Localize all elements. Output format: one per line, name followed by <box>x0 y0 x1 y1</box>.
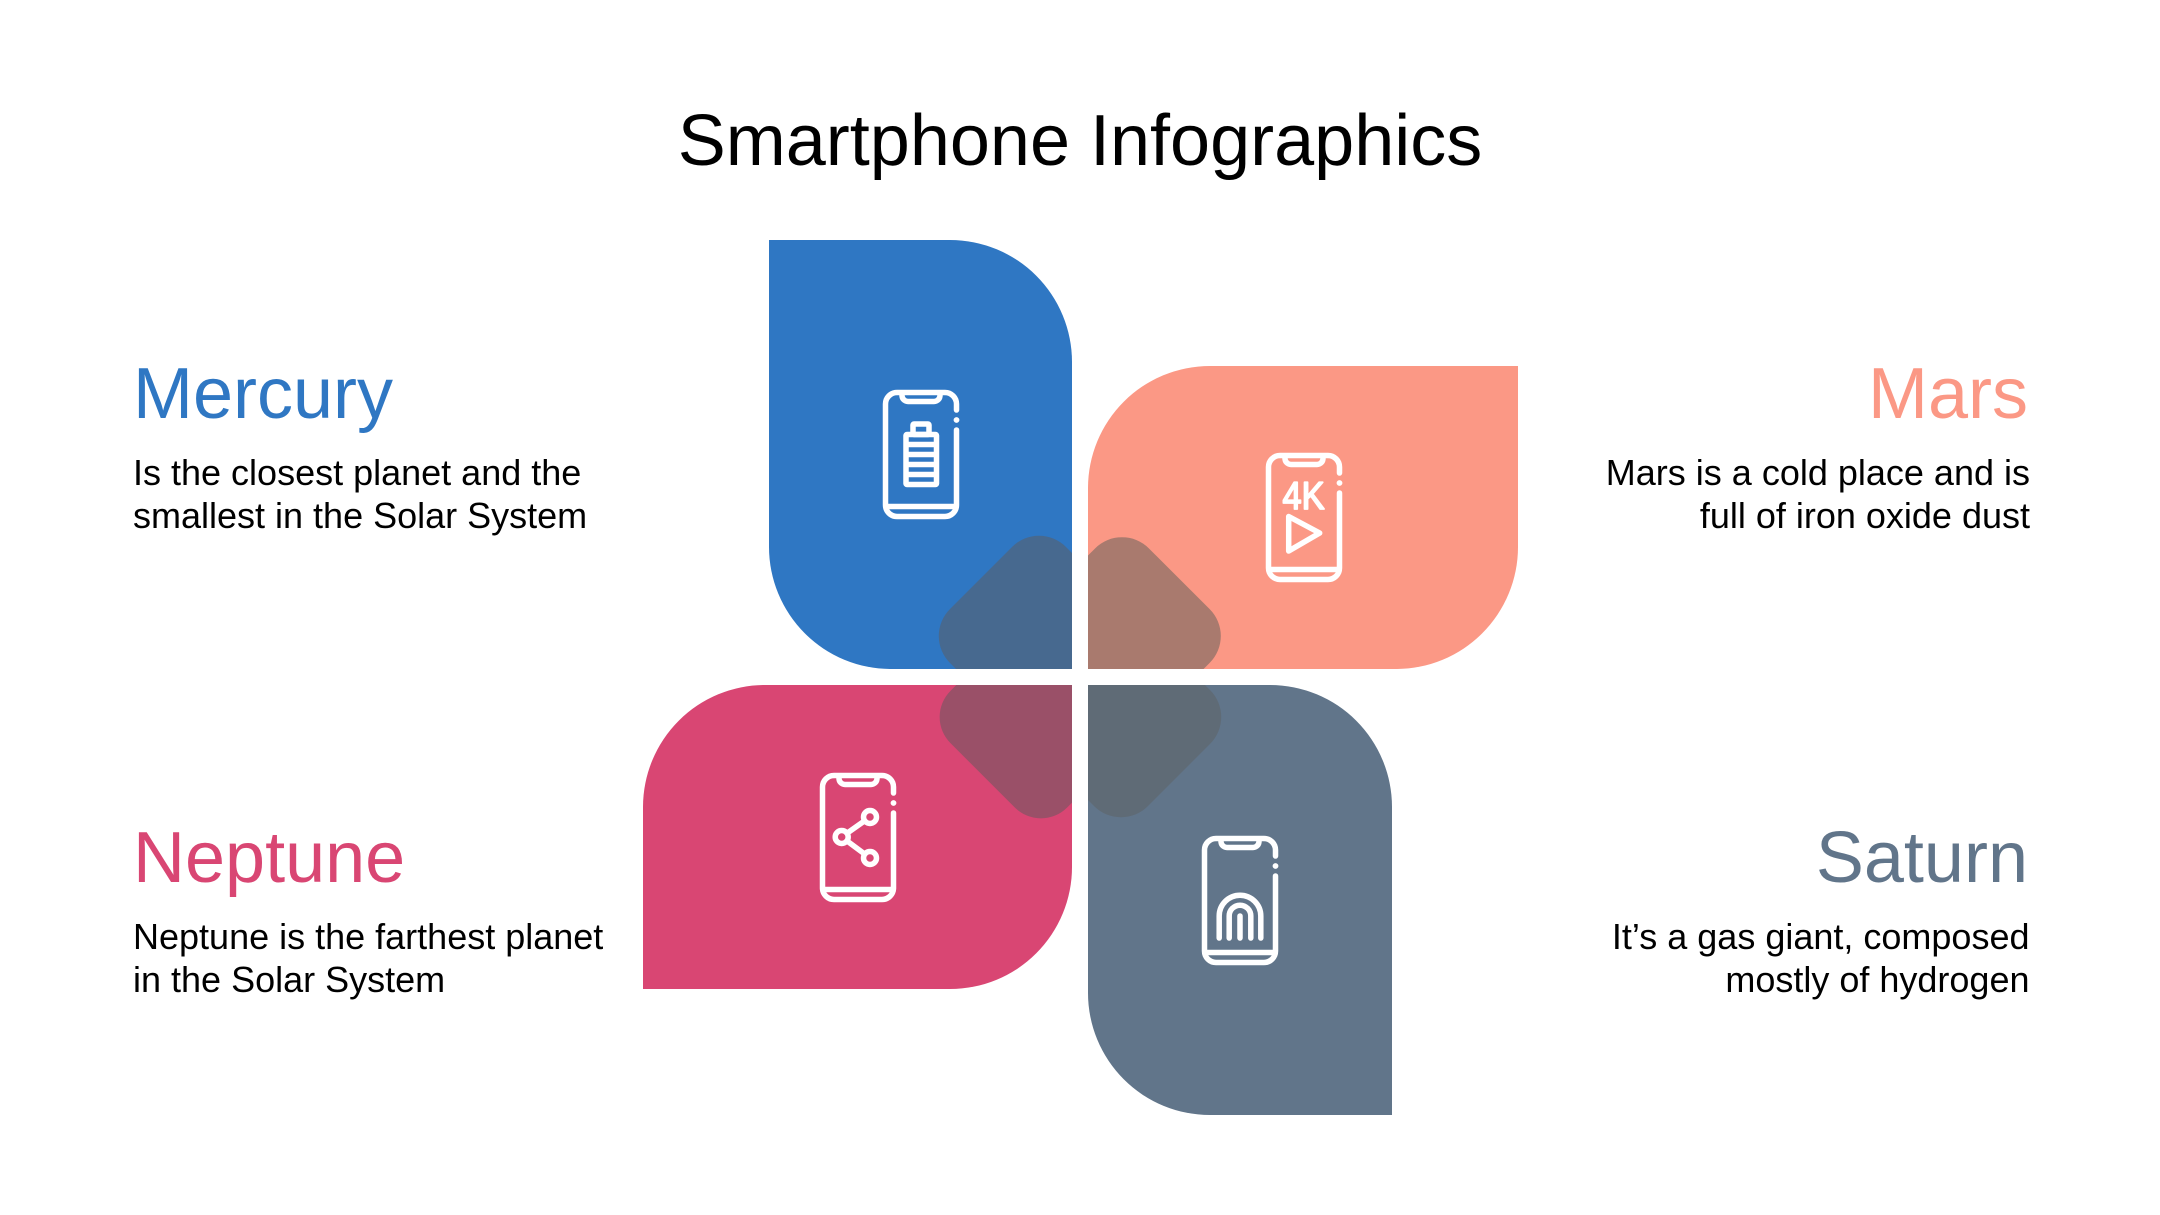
text block: Saturn description: mostly of hydrogen <box>1725 959 2030 1000</box>
petal: Saturn <box>1088 685 1392 1115</box>
title: Smartphone Infographics <box>678 101 1482 181</box>
panel: Neptune text <box>133 818 603 1000</box>
text block: Saturn description: It’s a gas giant, composed <box>1612 916 2030 957</box>
petal: Mercury <box>769 240 1072 669</box>
panel: Mercury text <box>133 354 587 536</box>
heading: Saturn: Saturn <box>1816 818 2028 898</box>
petal shape: blue <box>769 240 1072 669</box>
text block: Mercury description: smallest in the Solar System <box>133 495 587 536</box>
text block: Neptune description: in the Solar System <box>133 959 445 1000</box>
icon: phone with 4K video <box>1268 456 1342 580</box>
heading: Neptune: Neptune <box>133 818 405 898</box>
overlap: pink <box>940 685 1072 818</box>
panel: Saturn text <box>1612 818 2030 1000</box>
text block: Mars description: Mars is a cold place and is <box>1606 452 2030 493</box>
heading: Mercury: Mercury <box>133 354 393 434</box>
text block: Neptune description: Neptune is the farthest planet <box>133 916 603 957</box>
icon: phone with share symbol <box>822 776 896 900</box>
panel: Mars text <box>1606 354 2030 536</box>
text block: Mercury description: Is the closest planet and the <box>133 452 581 493</box>
overlap: blue <box>938 536 1072 669</box>
petal shape: salmon <box>1088 366 1518 669</box>
icon: phone with 4K video: 4K <box>1282 475 1324 518</box>
petal shape: slate <box>1088 685 1392 1115</box>
overlap: salmon <box>1088 537 1221 669</box>
petal: Neptune <box>643 685 1072 989</box>
icon: phone with battery <box>886 392 959 516</box>
text block: Mars description: full of iron oxide dust <box>1700 495 2030 536</box>
petal: Mars <box>1088 366 1518 669</box>
petal shape: pink <box>643 685 1072 989</box>
overlap: slate <box>1088 685 1222 818</box>
icon: phone with fingerprint <box>1204 838 1278 962</box>
heading: Mars: Mars <box>1868 354 2028 434</box>
